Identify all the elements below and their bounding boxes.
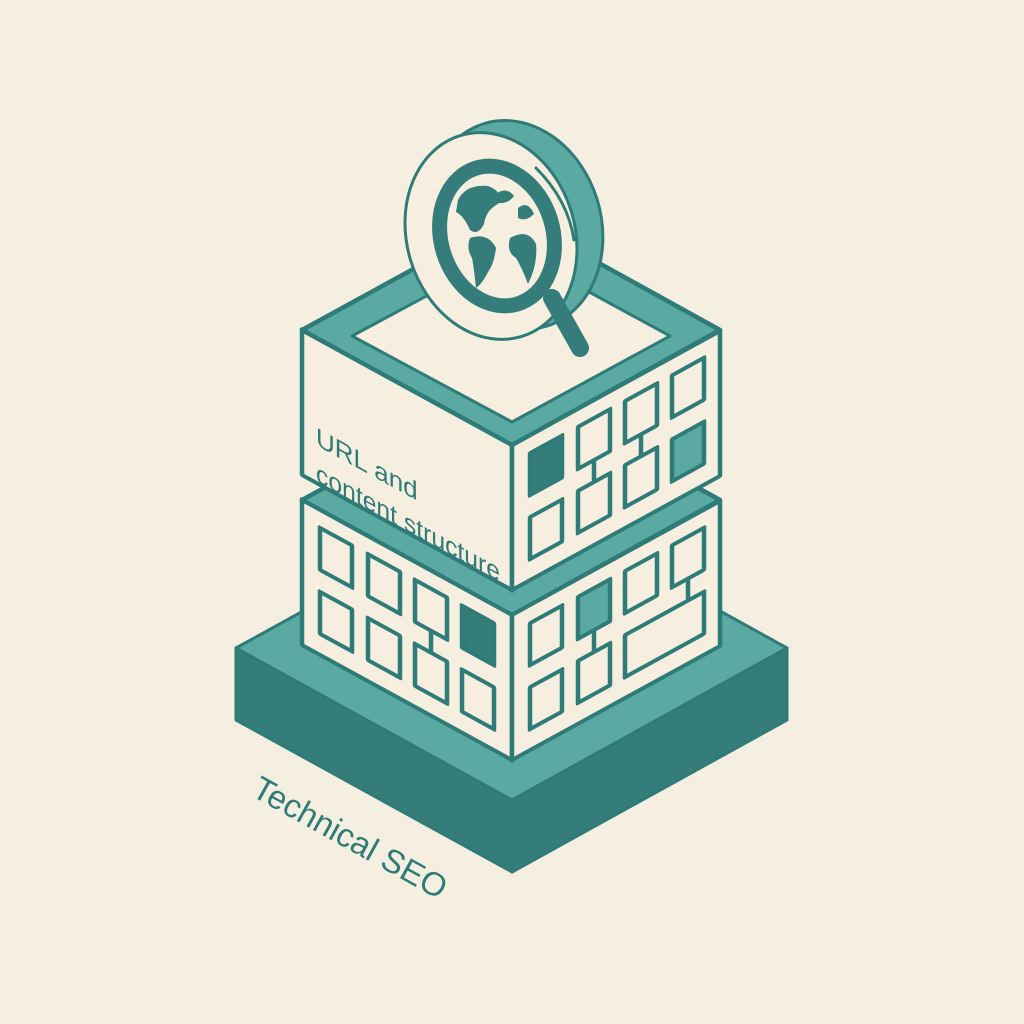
label: Technical SEO: Technical SEO xyxy=(247,769,454,906)
highlight arc xyxy=(536,168,574,240)
lens ring xyxy=(423,152,571,320)
handle xyxy=(552,298,580,348)
globe continents xyxy=(456,186,536,288)
upper top face xyxy=(302,215,720,445)
upper left face xyxy=(302,330,512,590)
lower right face xyxy=(512,501,720,760)
icon: magnifying glass with globe xyxy=(380,98,628,361)
label: URL and content structure: content structure xyxy=(316,458,500,588)
upper block xyxy=(302,215,720,590)
label: URL and content structure: URL and xyxy=(316,422,418,506)
upper right face xyxy=(512,331,720,590)
base slab xyxy=(236,496,787,872)
lower block xyxy=(302,385,720,760)
lower left face xyxy=(302,500,512,760)
